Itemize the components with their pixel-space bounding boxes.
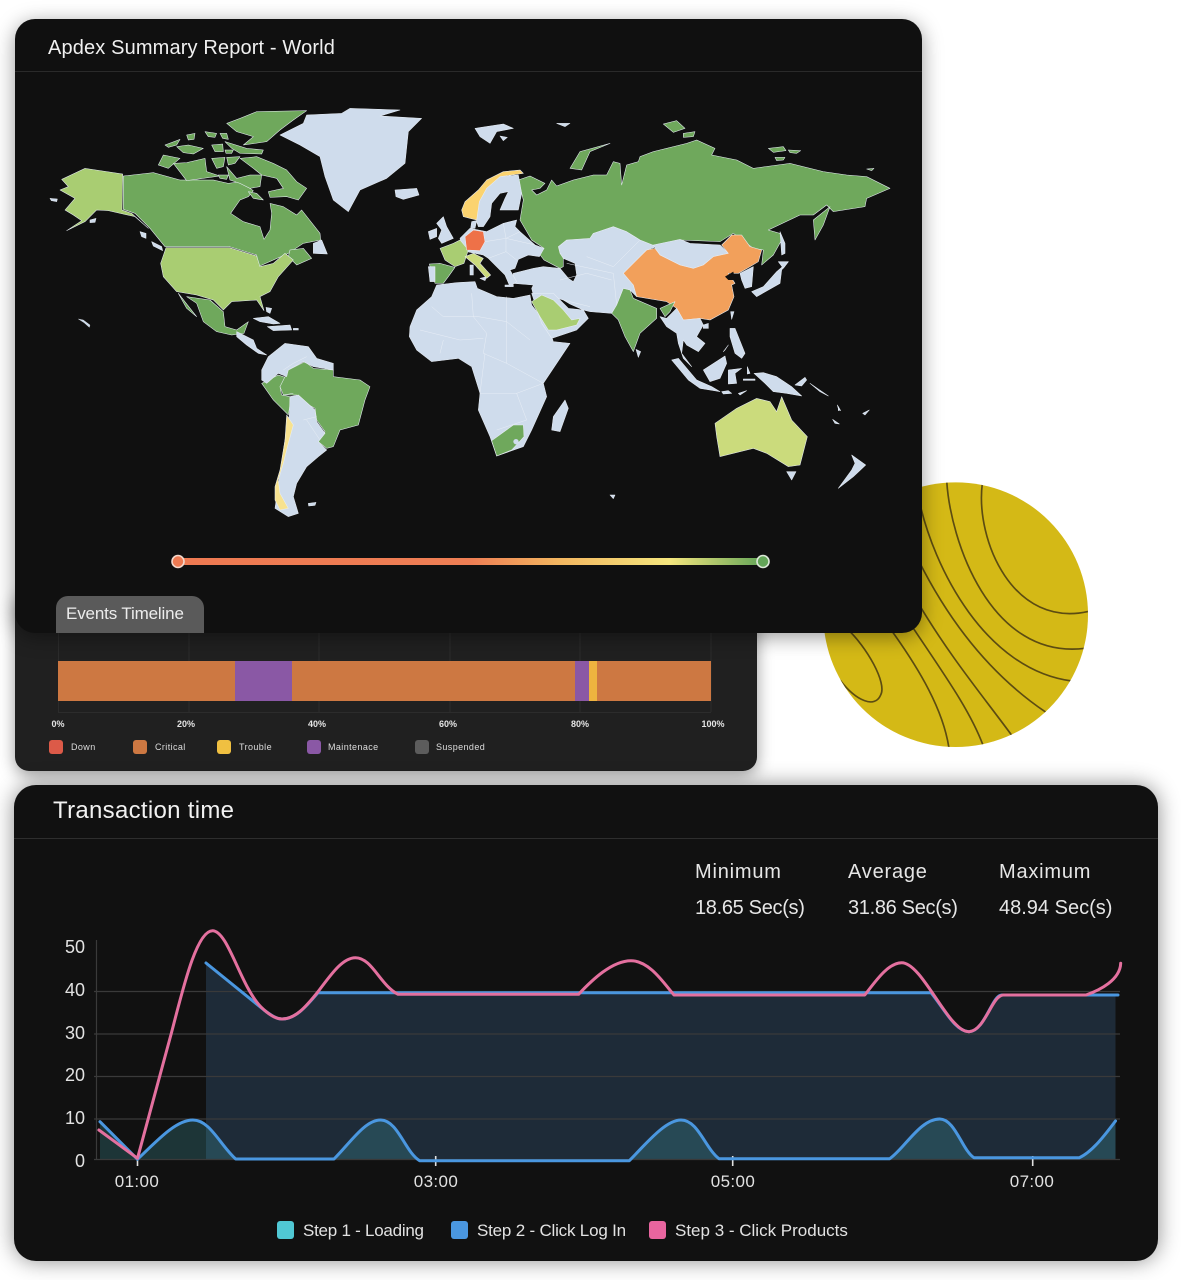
- stat: minimum: 18.65 Sec(s): [695, 897, 805, 919]
- timeline legend: Down: [71, 742, 96, 752]
- Europe: [460, 220, 544, 287]
- events timeline tab: [56, 596, 204, 633]
- heading: apdex summary: Apdex Summary Report - World: [48, 37, 335, 59]
- line chart: transaction time: 50: [65, 937, 85, 957]
- chart legend: Step 1 - Loading: [303, 1221, 424, 1240]
- stacked status bar chart: 40%: [308, 719, 326, 729]
- stacked status bar chart: [51, 633, 725, 729]
- timeline legend: Suspended: [436, 742, 485, 752]
- chart legend: Step 2 - Click Log In: [477, 1221, 626, 1240]
- line chart: transaction time: 30: [65, 1023, 85, 1043]
- line chart: transaction time: 05:00: [711, 1172, 755, 1191]
- stacked status bar chart: 0%: [51, 719, 65, 729]
- stacked status bar chart: 100%: [701, 719, 725, 729]
- stacked status bar chart: 20%: [177, 719, 195, 729]
- timeline legend: Trouble: [239, 742, 272, 752]
- timeline legend: Maintenace: [328, 742, 379, 752]
- heading: transaction time: Transaction time: [53, 797, 234, 824]
- apdex colour scale slider: [171, 554, 770, 568]
- chart legend: Step 3 - Click Products: [675, 1221, 848, 1240]
- line chart: transaction time: 07:00: [1010, 1172, 1054, 1191]
- decorative yellow contour circle: [824, 482, 1088, 747]
- line chart: transaction time: 0: [75, 1151, 85, 1171]
- world map: [50, 108, 890, 517]
- stat: average: Average: [848, 861, 928, 883]
- stat: minimum: Minimum: [695, 861, 782, 883]
- panel: transaction time: [14, 785, 1158, 1261]
- stat: average: 31.86 Sec(s): [848, 897, 958, 919]
- East and South-East Asia: [653, 239, 728, 268]
- line chart: transaction time: 01:00: [115, 1172, 159, 1191]
- line chart: transaction time: 20: [65, 1065, 85, 1085]
- stacked status bar chart: 60%: [439, 719, 457, 729]
- events timeline tab: Events Timeline: [66, 604, 184, 623]
- line chart: transaction time: 03:00: [414, 1172, 458, 1191]
- stat: average: [848, 861, 958, 919]
- central Asia and Middle East base: [513, 227, 657, 313]
- line chart: transaction time: 40: [65, 980, 85, 1000]
- panel: apdex summary world map: [15, 19, 922, 633]
- stat: minimum: [695, 861, 805, 919]
- stacked status bar chart: 80%: [571, 719, 589, 729]
- panel: events timeline: [15, 590, 757, 771]
- timeline legend: [49, 740, 485, 754]
- stat: maximum: 48.94 Sec(s): [999, 897, 1112, 919]
- line chart: transaction time: 10: [65, 1108, 85, 1128]
- timeline legend: Critical: [155, 742, 186, 752]
- stat: maximum: Maximum: [999, 861, 1091, 883]
- Africa: [409, 282, 570, 456]
- stat: maximum: [999, 861, 1112, 919]
